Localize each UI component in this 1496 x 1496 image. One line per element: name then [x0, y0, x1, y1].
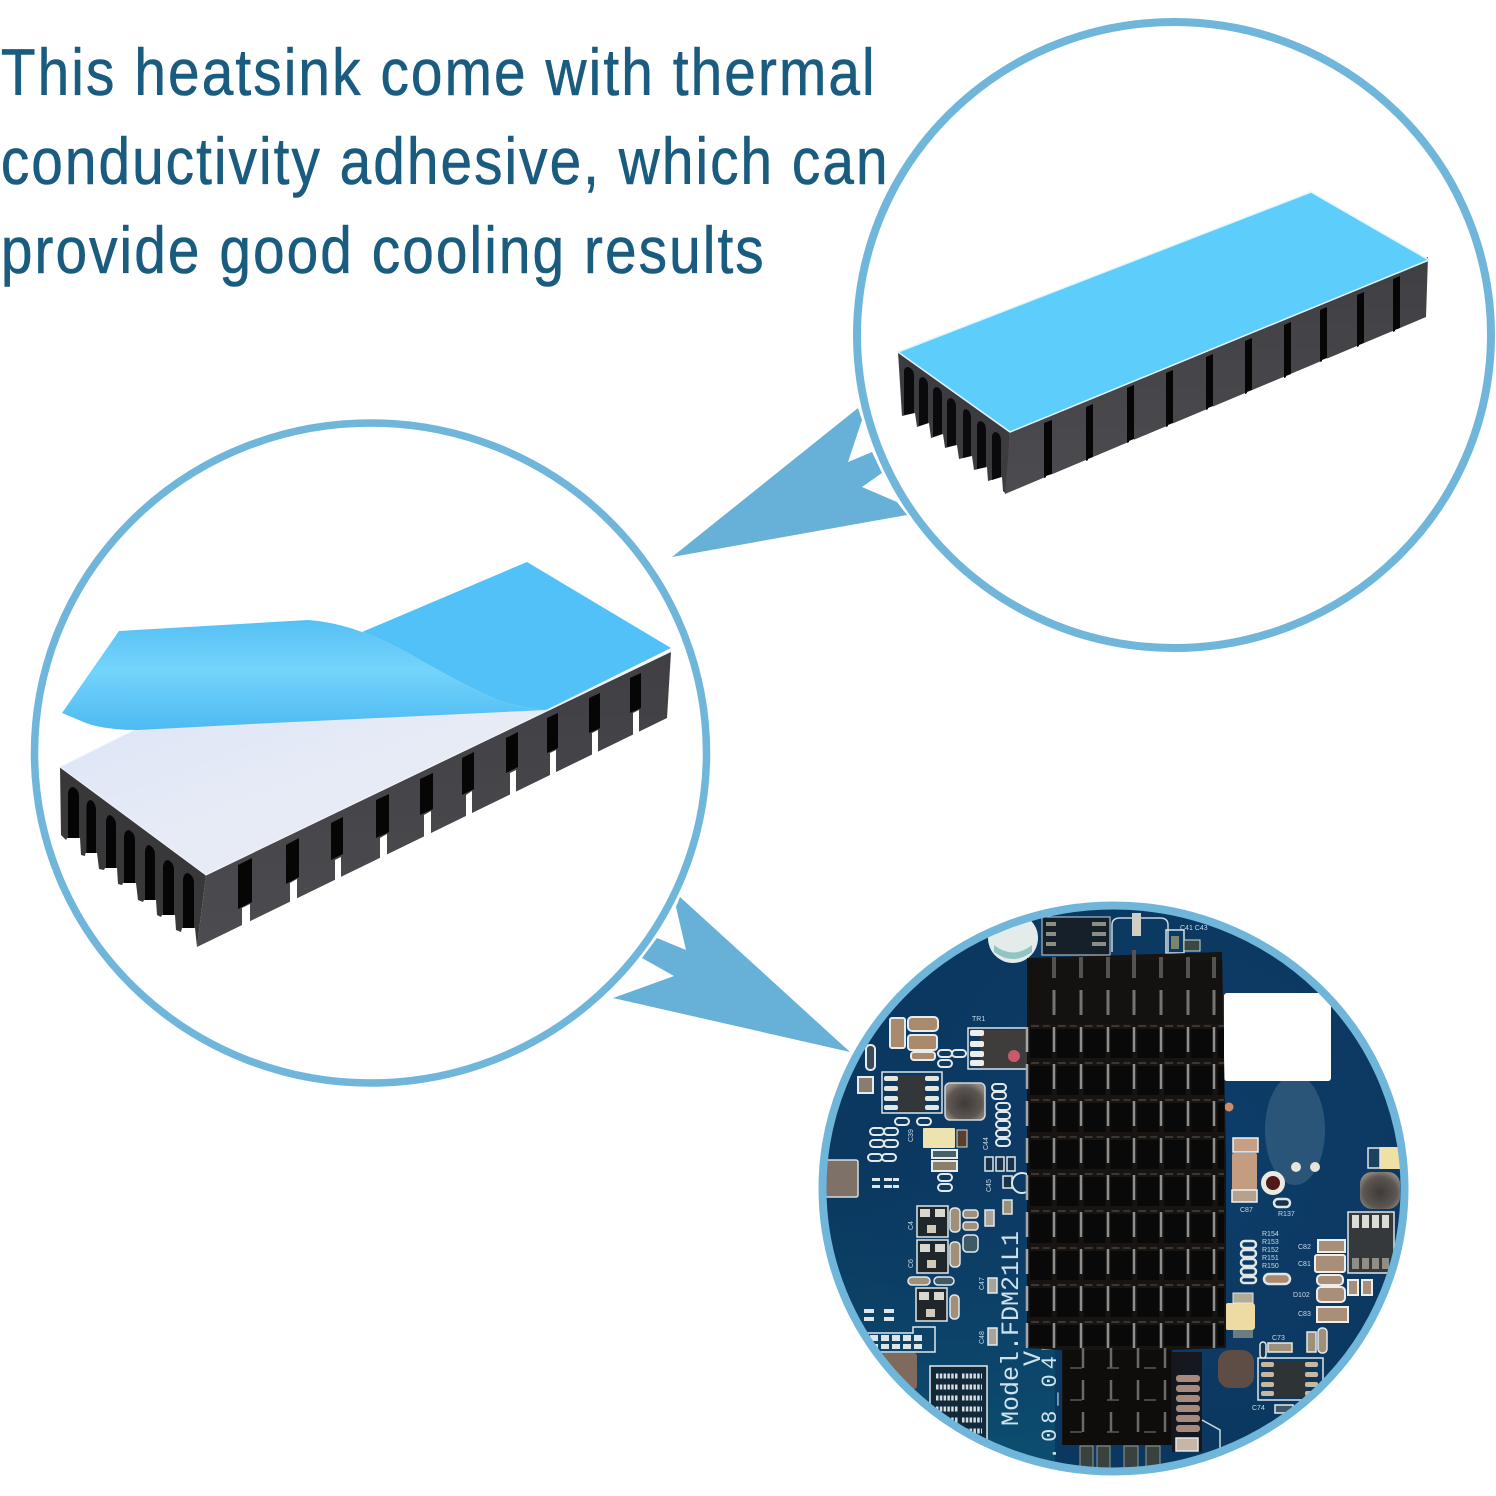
white label on board: [1224, 993, 1331, 1081]
heat sink top fins: [1054, 950, 1214, 978]
small silkscreen labels: R152: [1262, 1247, 1279, 1254]
small silkscreen labels: R151: [1262, 1255, 1279, 1262]
component: via ring: [1264, 1174, 1282, 1192]
small silkscreen labels: [908, 925, 1311, 1412]
peeled blue film flap: [62, 620, 546, 730]
small silkscreen labels: C81: [1298, 1261, 1311, 1268]
small silkscreen labels: C74: [1252, 1405, 1265, 1412]
circuit board base: [1226, 1136, 1231, 1188]
heatsink long side: [197, 652, 671, 947]
panel: bottom circle, heatsink installed on circuit board: [815, 895, 1415, 1485]
small silkscreen labels: C39: [908, 1129, 915, 1142]
title text: provide good cooling results: [1, 214, 764, 288]
circle border: [822, 906, 1404, 1472]
component: chips beside transistors: [908, 1208, 997, 1345]
heatsink end face: [898, 352, 1010, 494]
component: chips above lower chip: [1260, 1328, 1327, 1413]
heatsink end slots: [904, 367, 1001, 480]
top components: [1042, 913, 1200, 955]
small silkscreen labels: C83: [1298, 1311, 1311, 1318]
blue thermal adhesive film: [898, 192, 1429, 432]
small silkscreen labels: R137: [1278, 1211, 1295, 1218]
component: power chip with pink via: [968, 1028, 1028, 1069]
component: upper left chip resistors: [858, 1017, 957, 1171]
model silkscreen: [1000, 1232, 1058, 1455]
flux smudge: [1265, 1075, 1325, 1185]
small silkscreen labels: R153: [1262, 1239, 1279, 1246]
heatsink long side slots: [1044, 276, 1400, 478]
small silkscreen labels: C47: [979, 1277, 986, 1290]
top capacitor: [988, 921, 1038, 963]
component: resistor pack near heat sink: [985, 1084, 1032, 1214]
component: two vias: [1291, 1162, 1320, 1172]
heatsink long side slots: [238, 673, 641, 909]
component: transistor block 1: [917, 1206, 948, 1237]
title text: [1, 36, 888, 288]
component: connector strip: [867, 1327, 935, 1352]
component: bottom-left pads: [864, 1178, 899, 1321]
component: gold pad connector at heat sink foot: [1172, 1352, 1220, 1455]
heatsink end face: [60, 767, 206, 947]
component: right beige capacitor: [1368, 1147, 1402, 1169]
small silkscreen labels: TR1: [972, 1016, 985, 1023]
component: small outline chip, lower right: [1258, 1358, 1323, 1400]
small silkscreen labels: C6: [908, 1259, 915, 1268]
exposed white adhesive surface: [60, 651, 671, 875]
component: beige capacitor: [923, 1128, 967, 1148]
title text: conductivity adhesive, which can: [1, 125, 888, 199]
small silkscreen labels: C41 C43: [1180, 925, 1208, 932]
component: right tan capacitor: [1232, 1138, 1258, 1202]
small silkscreen labels: D102: [1293, 1292, 1310, 1299]
small silkscreen labels: C44: [983, 1137, 990, 1150]
small silkscreen labels: C48: [979, 1331, 986, 1344]
component: small outline chip, left: [882, 1072, 942, 1113]
callout pointer: top circle to middle circle: [672, 408, 907, 557]
component: inductor at left edge: [825, 1160, 858, 1197]
component: resistor grid chip: [930, 1366, 987, 1441]
model silkscreen: V: [1019, 1351, 1048, 1366]
model silkscreen: Model.FDM21L1: [997, 1231, 1026, 1426]
small silkscreen labels: C73: [1272, 1335, 1285, 1342]
callout pointer: middle circle to bottom circle: [613, 897, 850, 1052]
heatsink long side: [1005, 257, 1428, 494]
component: inductor coil, left: [945, 1083, 985, 1120]
component: right coil: [1360, 1172, 1400, 1209]
component: resistor stack: [1241, 1199, 1290, 1284]
component: bottom chip row: [1080, 1446, 1160, 1468]
fin notches: [1046, 328, 1400, 482]
component: small pads cluster: [868, 1050, 966, 1191]
component: brown coil bottom left: [880, 1353, 917, 1389]
component: orange via: [1224, 1102, 1234, 1112]
heatsink end slots: [68, 787, 194, 928]
small silkscreen labels: C45: [986, 1179, 993, 1192]
remaining blue film: [362, 562, 671, 710]
small silkscreen labels: R154: [1262, 1231, 1279, 1238]
small silkscreen labels: R150: [1262, 1263, 1279, 1270]
component: right chip stack: [1315, 1240, 1372, 1322]
small silkscreen labels: C4: [908, 1221, 915, 1230]
component: brown coil, lower right: [1218, 1350, 1254, 1388]
black finned heat sink on board: [1027, 950, 1226, 1445]
panel: middle circle, film being peeled off: [34, 423, 706, 1083]
small silkscreen labels: C87: [1240, 1207, 1253, 1214]
component: beige capacitor, lower right: [1225, 1293, 1255, 1338]
title text: This heatsink come with thermal: [1, 36, 875, 110]
small silkscreen labels: C82: [1298, 1244, 1311, 1251]
component: small outline chip, right edge: [1348, 1212, 1394, 1273]
component: transistor block 2: [917, 1240, 948, 1273]
model silkscreen: .08_04E: [1038, 1338, 1063, 1460]
panel: top circle, heatsink with protective film: [857, 22, 1491, 648]
component: transistor block 3: [916, 1288, 947, 1321]
heat sink fin gaps: [1054, 1027, 1214, 1348]
fin notches: [242, 710, 639, 930]
